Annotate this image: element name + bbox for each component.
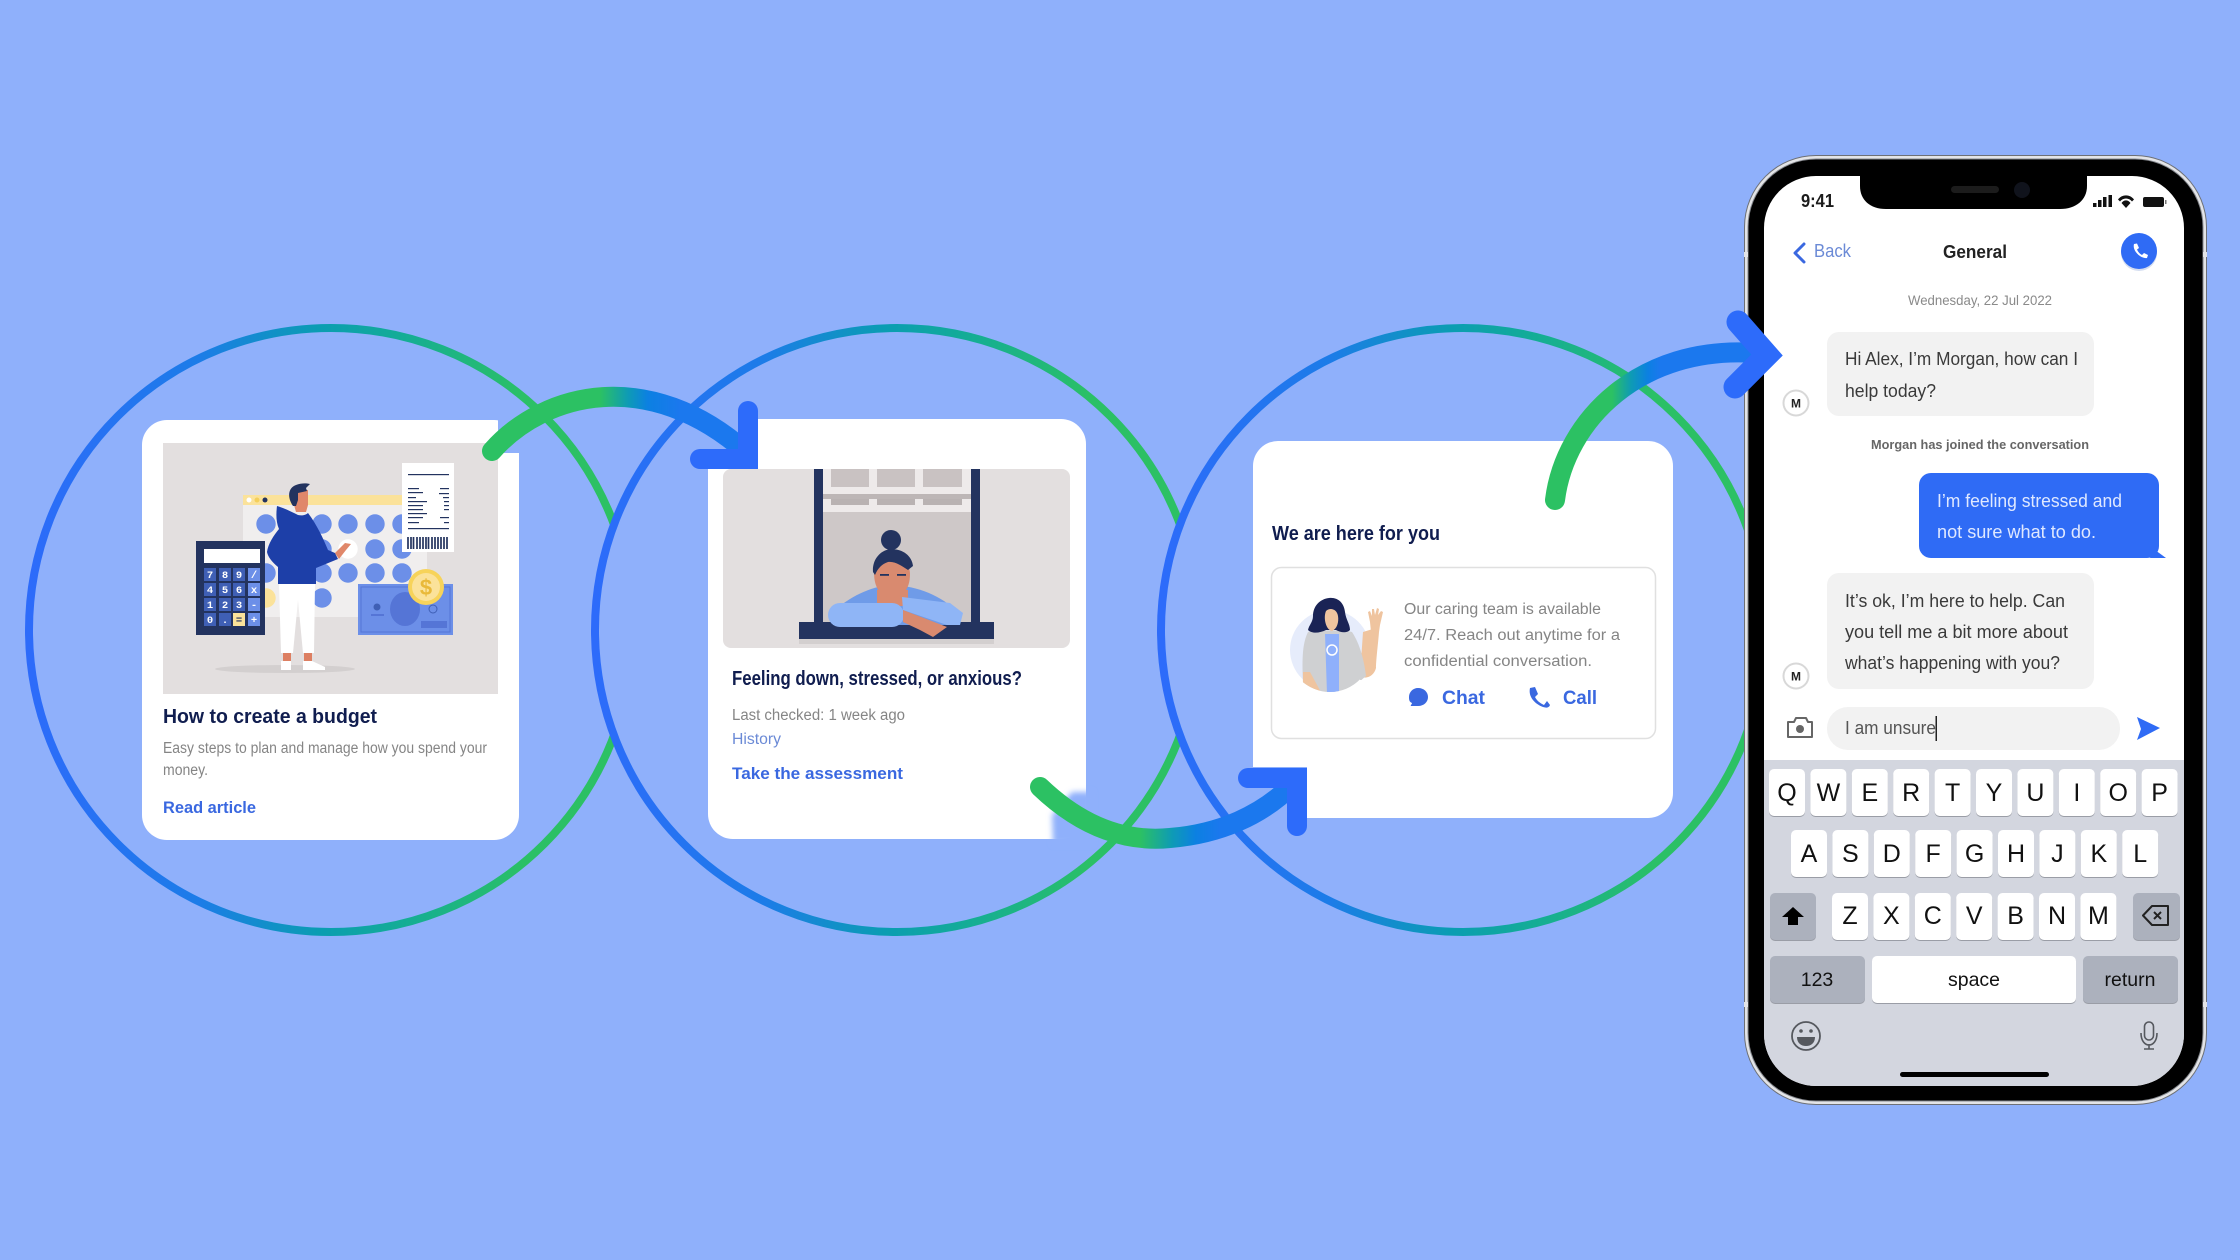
illustration: waving support agent	[1290, 598, 1383, 694]
message: agent reply: what’s happening with you?	[1844, 653, 2060, 673]
avatar: M	[1791, 670, 1801, 684]
message: agent greeting: Hi Alex, I’m Morgan, how can I	[1845, 349, 2078, 369]
key labels: L	[2133, 840, 2147, 868]
date: Wednesday, 22 Jul 2022	[1908, 293, 2052, 308]
description: 24/7. Reach out anytime for a	[1404, 627, 1620, 644]
message: user: I’m feeling stressed and	[1937, 491, 2122, 511]
key labels: I	[2073, 779, 2080, 807]
key labels: J	[2051, 840, 2064, 868]
history link: History	[732, 731, 781, 748]
phone	[1744, 155, 2207, 1105]
icon: coin: $	[420, 575, 432, 600]
icon: calculator: 1	[207, 600, 213, 612]
panel: assessment card	[704, 415, 1092, 844]
heading: Feeling down, stressed, or anxious?	[732, 668, 1022, 690]
icon: calculator: 4	[207, 585, 213, 597]
key labels: D	[1883, 840, 1901, 868]
key labels: space	[1948, 969, 2000, 991]
phone screen	[1764, 170, 2184, 1086]
illustration: person leaning on window sill	[723, 469, 1070, 648]
icon: calculator: +	[251, 615, 257, 627]
key labels: G	[1965, 840, 1984, 868]
key labels: A	[1801, 840, 1818, 868]
icon: calculator: =	[236, 615, 242, 627]
icon: coin	[408, 569, 444, 605]
key labels: U	[2026, 779, 2044, 807]
icon: calculator: 2	[222, 600, 228, 612]
function keys	[1770, 893, 2180, 1003]
icon: calculator: 8	[222, 570, 228, 582]
icon: calculator: 5	[222, 585, 228, 597]
avatar	[1784, 664, 1808, 688]
description: money.	[163, 762, 208, 779]
key labels: Y	[1986, 779, 2003, 807]
message: agent reply: you tell me a bit more about	[1845, 622, 2068, 642]
icon: delete	[2143, 906, 2168, 925]
icon: calculator: 7	[207, 570, 213, 582]
status bar: 9:41	[1801, 191, 1834, 211]
message input	[1827, 707, 2120, 750]
call action	[1530, 687, 1597, 709]
link: Take the assessment	[732, 764, 903, 783]
key labels: Q	[1777, 779, 1797, 807]
message input: I am unsure	[1845, 718, 1936, 738]
icon: calculator: .	[222, 615, 228, 627]
icon: banknote	[358, 584, 453, 635]
message: user: not sure what to do.	[1937, 522, 2096, 542]
description	[1404, 601, 1620, 670]
letter keys	[1769, 769, 2178, 1003]
ring: step three	[1161, 328, 1765, 932]
panel: contact card	[1249, 441, 1673, 822]
key labels: Z	[1842, 902, 1858, 930]
icon: calculator	[196, 541, 265, 635]
key labels: C	[1924, 902, 1942, 930]
icon: calculator: 0	[207, 615, 213, 627]
key labels: W	[1817, 779, 1841, 807]
key labels: M	[2088, 902, 2109, 930]
icon: shift	[1782, 907, 1804, 925]
status bar	[1802, 194, 2166, 208]
key labels: T	[1945, 779, 1960, 807]
infographic canvas	[25, 155, 2207, 1105]
icon: microphone	[2141, 1022, 2157, 1049]
navigation header: General	[1943, 242, 2007, 262]
key labels: 123	[1801, 969, 1833, 991]
key labels	[1777, 779, 2168, 991]
figure: person in hoodie	[215, 483, 355, 673]
key labels: H	[2007, 840, 2025, 868]
key labels: E	[1861, 779, 1878, 807]
icon: calculator: 3	[236, 600, 242, 612]
inner contact box	[1272, 568, 1656, 738]
icon: calculator: 6	[236, 585, 242, 597]
notch	[1860, 176, 2087, 209]
description: Easy steps to plan and manage how you spend your	[163, 740, 487, 757]
key labels: return	[2105, 969, 2155, 991]
status text: Last checked: 1 week ago	[732, 707, 905, 724]
icon: calculator: -	[251, 600, 257, 612]
avatar: M	[1791, 396, 1801, 410]
ring: step two	[595, 328, 1199, 932]
message: agent reply	[1827, 573, 2094, 689]
ring: step one	[29, 328, 633, 932]
icon: emoji	[1792, 1022, 1820, 1050]
key labels: O	[2108, 779, 2128, 807]
key labels: N	[2048, 902, 2066, 930]
chat action: Chat	[1442, 687, 1485, 709]
icon: receipt	[402, 463, 454, 552]
icon: send	[2137, 717, 2160, 740]
icon: calculator: 9	[236, 570, 242, 582]
system message: Morgan has joined the conversation	[1871, 437, 2089, 452]
key labels: R	[1902, 779, 1920, 807]
heading: How to create a budget	[163, 706, 377, 728]
key labels: V	[1966, 902, 1983, 930]
description	[163, 740, 487, 779]
message: agent greeting	[1827, 332, 2094, 416]
icon: calculator: /	[251, 570, 257, 582]
icon: camera	[1788, 718, 1812, 737]
key labels: K	[2090, 840, 2107, 868]
key labels: X	[1883, 902, 1900, 930]
call action: Call	[1563, 687, 1597, 709]
avatar	[1784, 390, 1808, 416]
key labels: S	[1842, 840, 1859, 868]
key labels: F	[1926, 840, 1941, 868]
arrow: step one to step two	[492, 397, 748, 459]
icon: calculator: x	[251, 585, 258, 597]
navigation header	[1795, 233, 2157, 271]
arrow: step three to phone chat	[1555, 322, 1767, 500]
home indicator	[1900, 1072, 2049, 1077]
link: Read article	[163, 798, 256, 817]
panel: budget article card	[142, 416, 523, 840]
description: confidential conversation.	[1404, 653, 1592, 670]
illustration: person with calendar, calculator, receipt and money	[163, 443, 498, 694]
navigation header: Back	[1814, 241, 1852, 261]
heading: We are here for you	[1272, 523, 1440, 545]
message: agent greeting: help today?	[1845, 381, 1936, 401]
description: Our caring team is available	[1404, 601, 1601, 618]
chat action	[1409, 687, 1485, 709]
keyboard	[1764, 760, 2184, 1086]
arrow: step two to step three	[1040, 778, 1297, 839]
key labels: B	[2007, 902, 2024, 930]
key labels: P	[2151, 779, 2168, 807]
message: user	[1919, 473, 2166, 558]
message: agent reply: It’s ok, I’m here to help. Can	[1845, 591, 2065, 611]
